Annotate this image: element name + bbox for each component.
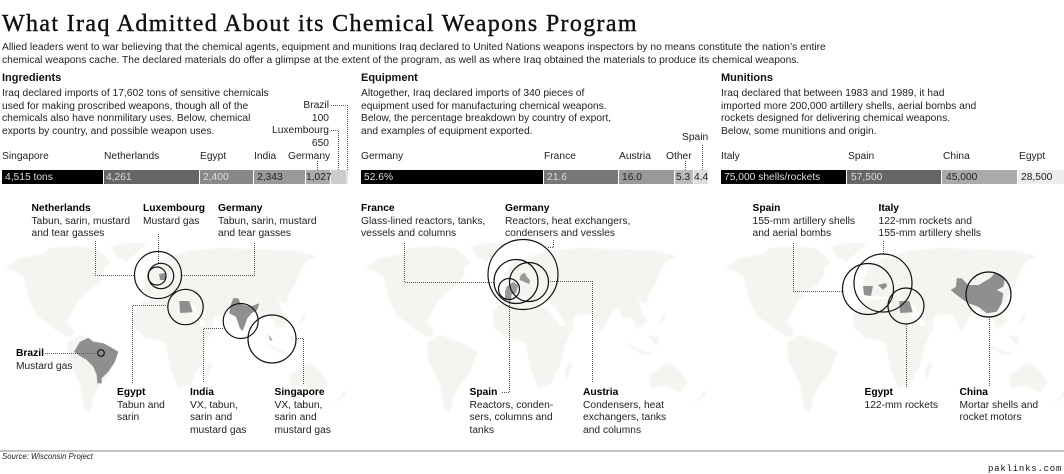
label: China [960, 387, 1038, 423]
label: Egypt [117, 387, 165, 423]
label: Egypt munitions: 122-mm rockets [864, 400, 938, 410]
label: Netherlands: Tabun, sarin, mustard [32, 216, 130, 226]
heading: equipment: Equipment [361, 72, 418, 84]
label: Germany equipment: Germany [505, 203, 549, 214]
bar label: Brazil: 100 [312, 112, 329, 124]
highlighted countries: munitions [863, 273, 1005, 313]
text: equipment [361, 88, 611, 136]
source: Source: Wisconsin Project [2, 452, 93, 461]
bar labels: ingredients: India [254, 151, 276, 162]
text: equipment: Altogether, Iraq declared imports of 340 pieces of [361, 88, 584, 99]
bar labels: munitions: China [943, 151, 970, 162]
highlighted countries: equipment [505, 273, 530, 301]
bar values: ingredients: 4,261 [106, 172, 132, 183]
map: equipment [365, 243, 706, 412]
label: Spain equipment: Spain [470, 387, 497, 398]
circles: equipment [488, 240, 558, 310]
label: Egypt: sarin [117, 412, 139, 423]
text: munitions: rockets designed for delivering chemical weapons. [721, 113, 950, 124]
label: Germany equipment: Reactors, heat exchangers, [505, 216, 630, 226]
label: Egypt munitions [864, 387, 938, 410]
label: Luxembourg [143, 203, 205, 226]
text: ingredients: used for making proscribed weapons, though all of the [2, 100, 248, 112]
heading: munitions: Munitions [721, 72, 773, 84]
label: Singapore [274, 387, 331, 436]
bar chart: ingredients [2, 170, 348, 184]
text: equipment: equipment used for manufacturing chemical weapons. [361, 100, 607, 112]
label: Egypt munitions: Egypt [864, 387, 893, 398]
label: Singapore: mustard gas [274, 424, 331, 436]
label: Austria: and columns [583, 424, 641, 436]
label: Brazil: Mustard gas [16, 360, 72, 372]
bar values: munitions: 28,500 [1021, 172, 1052, 183]
label: China: rocket motors [960, 412, 1022, 423]
label: Spain munitions: and aerial bombs [752, 228, 831, 239]
bar values: ingredients: 2,343 [257, 172, 283, 183]
label: Italy: 122-mm rockets and [878, 216, 972, 226]
bar values: equipment: 5.3 [676, 172, 690, 183]
label: France [361, 203, 485, 239]
text: equipment: Below, the percentage breakdown by country of export, [361, 113, 611, 124]
bar labels: equipment [361, 151, 692, 162]
bar labels: ingredients: Egypt [200, 151, 226, 162]
bar values: ingredients: 1,027 [306, 172, 332, 183]
bar labels: ingredients: Germany [288, 151, 330, 162]
label: Germany: Tabun, sarin, mustard [218, 216, 317, 226]
bar values: ingredients: 2,400 [203, 172, 229, 183]
circles: munitions [842, 254, 1011, 324]
bar values: ingredients [5, 172, 332, 183]
label: Spain equipment: Reactors, conden- [470, 400, 553, 410]
text: munitions: imported more 200,000 artillery shells, aerial bombs and [721, 100, 976, 112]
label: Netherlands: and tear gasses [32, 228, 104, 239]
bar label: Brazil [303, 100, 329, 124]
label: Italy [878, 203, 981, 239]
label: India: mustard gas [190, 424, 246, 436]
text: munitions: Below, some munitions and origin. [721, 126, 877, 136]
label: China: Mortar shells and [960, 400, 1038, 410]
bar values: ingredients: 4,515 tons [5, 172, 53, 183]
bar label: Luxembourg: Luxembourg [272, 125, 329, 136]
highlighted countries: ingredients [74, 273, 273, 383]
intro text [2, 42, 826, 66]
text: ingredients: chemicals also have nonmilitary uses. Below, chemical [2, 113, 250, 124]
bar labels: munitions: Italy [721, 151, 740, 162]
leader lines [45, 106, 990, 392]
text: equipment: and examples of equipment exported. [361, 126, 533, 136]
map: ingredients [5, 243, 346, 412]
label: Luxembourg: Mustard gas [143, 216, 199, 226]
bar labels: ingredients [2, 151, 330, 162]
label: India: VX, tabun, [190, 400, 238, 410]
watermark: paklinks.com [988, 464, 1062, 474]
label: Germany equipment [505, 203, 630, 239]
text: ingredients [2, 88, 269, 136]
bar labels: equipment: Germany [361, 151, 403, 162]
text: ingredients: Iraq declared imports of 17,602 tons of sensitive chemicals [2, 88, 269, 99]
footer rule [0, 450, 1064, 452]
label: Egypt: Tabun and [117, 400, 165, 410]
bar labels: equipment: Austria [619, 151, 651, 162]
bar values: munitions: 57,500 [851, 172, 882, 183]
label: Austria [583, 387, 666, 436]
label: Luxembourg: Luxembourg [143, 203, 205, 214]
bar values: equipment [364, 172, 708, 183]
label: France: Glass-lined reactors, tanks, [361, 216, 485, 226]
bar chart: equipment [361, 170, 708, 184]
title: What Iraq Admitted About its Chemical Weapons Program [2, 11, 638, 37]
label: Singapore: VX, tabun, [274, 400, 322, 410]
bar label: Brazil: Brazil [303, 100, 329, 111]
bar chart: munitions [721, 170, 1064, 184]
label: Egypt: Egypt [117, 387, 145, 398]
label: Netherlands [32, 203, 130, 239]
label: Brazil [16, 348, 72, 372]
bar labels: equipment: France [544, 151, 576, 162]
label: Singapore: Singapore [274, 387, 325, 398]
label: Austria: Condensers, heat [583, 400, 664, 410]
bar labels: munitions: Egypt [1019, 151, 1045, 162]
bar labels: munitions [721, 151, 1046, 162]
bar values: equipment: 16.0 [622, 172, 642, 183]
text: munitions [721, 88, 976, 136]
label: Germany [218, 203, 317, 239]
intro text: chemical weapons cache. The declared materials do offer a glimpse at the extent of the program, as well as where Iraq obtained the materials to produce its chemical weapons. [2, 54, 799, 66]
intro text: Allied leaders went to war believing that the chemical agents, equipment and munitions Iraq declared to United Nations weapons inspectors by no means constitute the nation’s entire [2, 42, 826, 53]
label: France: vessels and columns [361, 228, 456, 239]
bar labels: ingredients: Netherlands [104, 151, 159, 162]
label: India: India [190, 387, 214, 398]
text: munitions: Iraq declared that between 1983 and 1989, it had [721, 88, 944, 99]
circles: ingredients [98, 252, 296, 363]
label: Singapore: sarin and [274, 412, 317, 423]
label: Italy: Italy [878, 203, 899, 214]
bar values: equipment: 4.4 [694, 172, 708, 183]
map: munitions [725, 243, 1064, 412]
label: China: China [960, 387, 988, 398]
bar label: Luxembourg: 650 [312, 138, 329, 148]
heading: ingredients: Ingredients [2, 72, 61, 84]
label: France: France [361, 203, 395, 214]
bar label: Luxembourg [272, 125, 329, 148]
label: Spain equipment: sers, columns and [470, 412, 553, 423]
label: Germany: Germany [218, 203, 262, 214]
bar values: munitions [724, 172, 1052, 183]
bar labels: munitions: Spain [848, 151, 874, 162]
label: Austria: exchangers, tanks [583, 412, 666, 423]
label: Brazil: Brazil [16, 348, 44, 359]
bar labels: ingredients: Singapore [2, 151, 49, 162]
label: India [190, 387, 246, 436]
label: Spain equipment [470, 387, 553, 436]
label: Spain munitions [752, 203, 855, 239]
bar values: munitions: 75,000 shells/rockets [724, 172, 820, 183]
text: ingredients: exports by country, and possible weapon uses. [2, 126, 214, 136]
label: India: sarin and [190, 412, 232, 423]
label: Spain equipment: tanks [470, 424, 494, 436]
bar labels: equipment: Other [666, 151, 692, 162]
bar values: equipment: 21.6 [547, 172, 567, 183]
bar label: Spain: Spain [682, 132, 708, 143]
label: Austria: Austria [583, 387, 618, 398]
label: Netherlands: Netherlands [32, 203, 91, 214]
label: Germany equipment: condensers and vessles [505, 228, 615, 239]
bar values: munitions: 45,000 [946, 172, 977, 183]
label: Italy: 155-mm artillery shells [878, 228, 981, 239]
label: Spain munitions: Spain [752, 203, 780, 214]
bar values: equipment: 52.6% [364, 172, 393, 183]
label: Spain munitions: 155-mm artillery shells [752, 216, 855, 226]
label: Germany: and tear gasses [218, 228, 291, 239]
